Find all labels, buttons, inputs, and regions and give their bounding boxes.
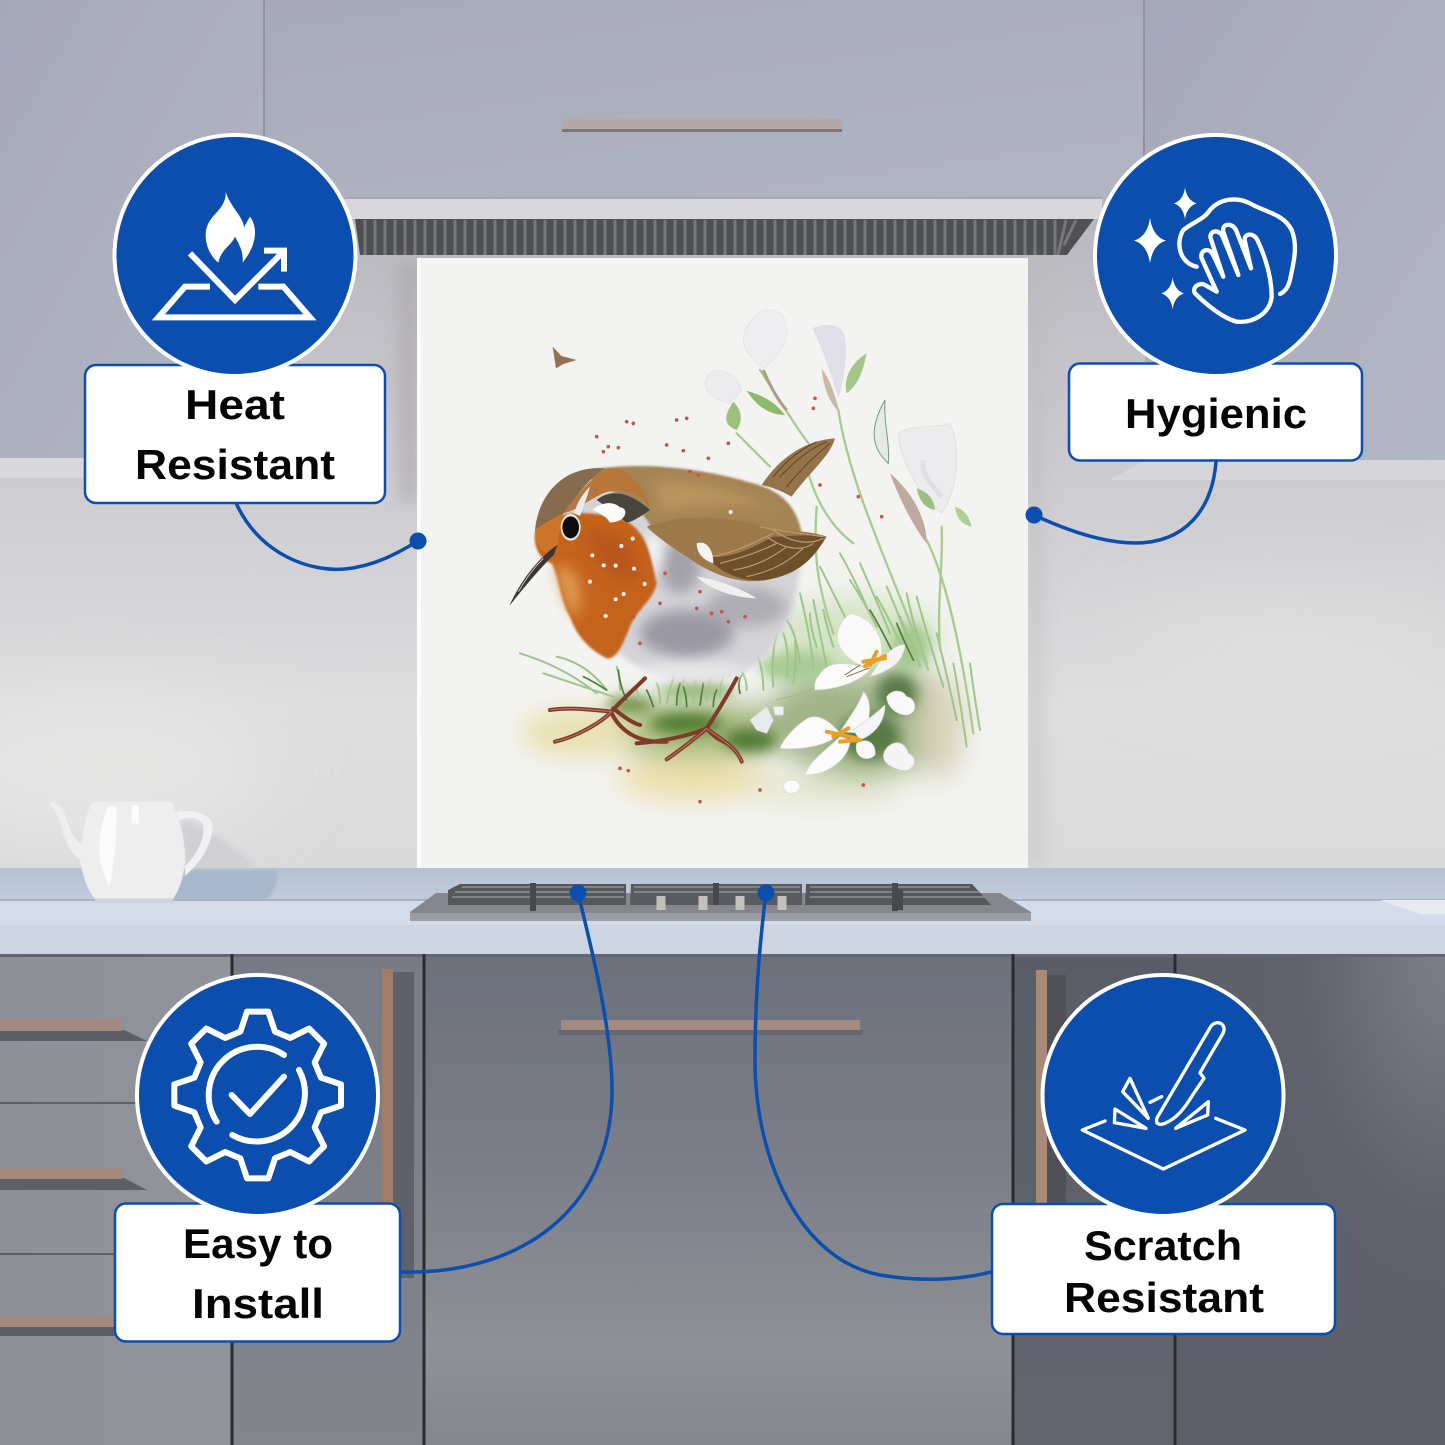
label box [992, 1204, 1335, 1334]
faded blossoms [705, 310, 957, 513]
label text [1064, 1222, 1264, 1321]
eye [561, 514, 581, 541]
tail [762, 438, 835, 497]
connector: scratch resistant [755, 884, 991, 1279]
eye stripe [574, 487, 590, 516]
white flowers [750, 613, 915, 793]
label box [115, 1204, 400, 1342]
label text: Heat [185, 381, 285, 428]
label text: Scratch [1084, 1222, 1242, 1269]
label text: Resistant [1064, 1274, 1264, 1321]
teapot body [48, 802, 185, 903]
moss [607, 623, 930, 760]
icon: gear with check [174, 1012, 341, 1178]
flower stamens [777, 652, 885, 742]
icon: flame and deflect arrow [158, 192, 310, 317]
beak [509, 545, 557, 606]
bird underlay [557, 475, 800, 680]
badge circle [1042, 975, 1284, 1216]
hob [410, 883, 1031, 921]
label text: Resistant [135, 441, 335, 488]
upper cabinet handle [562, 119, 842, 132]
shelf undersides [0, 458, 1445, 480]
label text [135, 381, 335, 488]
badge circle [1095, 135, 1336, 376]
printed splashback panel [417, 258, 1028, 868]
label box [1069, 364, 1362, 460]
badge circle [114, 135, 356, 376]
red paint flecks [597, 398, 882, 802]
moth [553, 347, 577, 368]
feature: hygienic [1069, 135, 1362, 460]
legs and feet [550, 678, 742, 762]
belly shading [637, 533, 787, 679]
label text: Easy to [183, 1220, 333, 1267]
connector: easy to install [401, 884, 612, 1272]
range hood [345, 197, 1102, 255]
bird painting [509, 310, 980, 802]
icon: hand wiping with sparkles [1134, 187, 1295, 322]
badge circle [137, 975, 378, 1216]
icon: knife scratching surface [1082, 1023, 1245, 1169]
shadow beside panel [400, 262, 1042, 867]
label text: Install [192, 1280, 324, 1327]
teapot shadow on worktop [173, 870, 277, 899]
brown back [590, 466, 802, 538]
teapot handle [177, 811, 213, 876]
connector: hygienic [1026, 462, 1216, 543]
white breast spots [590, 512, 731, 616]
orange breast [535, 513, 657, 658]
tall stems [737, 370, 973, 733]
leaves and buds [726, 353, 972, 543]
teapot shadow on wall [182, 820, 257, 868]
wall light wash [0, 600, 1445, 840]
feature: heat resistant [85, 135, 385, 503]
grass blades [520, 553, 980, 747]
head cap [535, 468, 650, 553]
panel surface [417, 258, 1028, 868]
feature: scratch resistant [992, 975, 1335, 1334]
connector: heat resistant [236, 503, 426, 569]
wall backsplash [0, 190, 1445, 880]
feature: easy to install [115, 975, 400, 1342]
label box [85, 365, 385, 503]
ground washes [520, 597, 963, 802]
worktop [0, 868, 1445, 954]
upper cabinets [0, 0, 1445, 460]
lower cabinets [0, 954, 1445, 1445]
label text: Hygienic [1125, 390, 1307, 437]
drawer handles [0, 969, 1066, 1336]
label text [183, 1220, 333, 1327]
cheek patch [593, 493, 650, 523]
wing [647, 518, 827, 598]
teapot [48, 802, 277, 903]
